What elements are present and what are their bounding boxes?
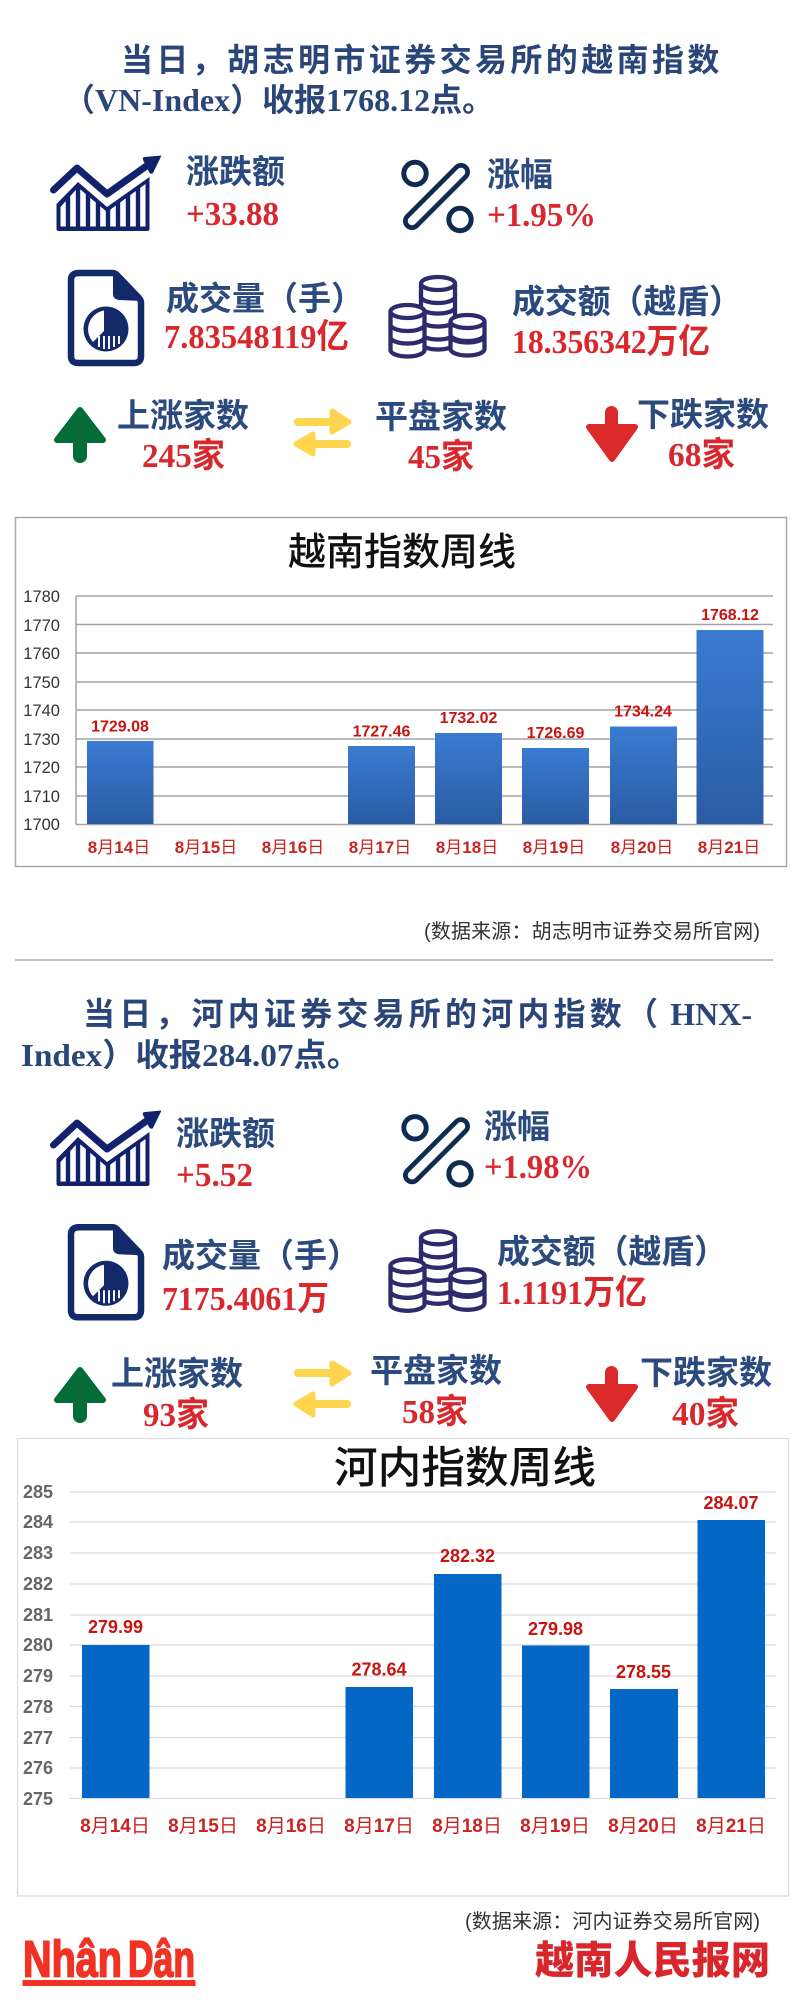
stat: change percent: 涨幅 bbox=[487, 157, 553, 194]
stat: change amount bbox=[186, 154, 285, 233]
stat: decliners bbox=[640, 1355, 772, 1433]
stat: turnover bbox=[497, 1234, 727, 1312]
stat: decliners: 下跌家数 bbox=[640, 1355, 772, 1392]
x axis labels: 8月20日 bbox=[608, 1816, 678, 1837]
icon: up arrow bbox=[57, 1370, 103, 1423]
stat: unchanged bbox=[375, 399, 507, 476]
stat: change percent bbox=[487, 157, 596, 234]
stat: unchanged: 45家 bbox=[408, 438, 474, 476]
y axis labels: 278 bbox=[23, 1697, 53, 1717]
stat: unchanged: 平盘家数 bbox=[370, 1353, 502, 1390]
stat: decliners: 下跌家数 bbox=[637, 397, 769, 434]
value labels: 1727.46 bbox=[353, 724, 411, 740]
x axis labels: 8月19日 bbox=[520, 1816, 590, 1837]
icon: down arrow bbox=[589, 406, 635, 459]
stat: decliners: 68家 bbox=[668, 436, 735, 474]
value labels: 279.99 bbox=[88, 1617, 143, 1637]
value labels bbox=[91, 607, 759, 742]
stat: change amount bbox=[176, 1116, 275, 1194]
stat: change percent: 涨幅 bbox=[484, 1109, 550, 1146]
stat: turnover: 成交额（越盾） bbox=[497, 1234, 727, 1271]
stat: advancers bbox=[111, 1356, 243, 1434]
bars bbox=[87, 630, 764, 824]
title: VN-Index bbox=[63, 42, 723, 118]
stat: advancers: 上涨家数 bbox=[117, 398, 249, 435]
stat: change amount: +5.52 bbox=[176, 1157, 253, 1194]
y axis labels: 1780 bbox=[23, 588, 60, 606]
x axis labels: 8月14日 bbox=[88, 838, 150, 857]
y axis labels: 284 bbox=[23, 1512, 53, 1532]
y axis labels: 276 bbox=[23, 1758, 53, 1778]
title: VN-Index: （VN-Index）收报1768.12点。 bbox=[63, 82, 494, 118]
value labels: 278.55 bbox=[616, 1662, 671, 1682]
stat: unchanged: 平盘家数 bbox=[375, 399, 507, 436]
stat: change amount: 涨跌额 bbox=[186, 154, 285, 191]
stat: advancers: 93家 bbox=[143, 1396, 209, 1434]
y axis labels: 283 bbox=[23, 1543, 53, 1563]
x axis labels: 8月15日 bbox=[175, 838, 237, 857]
icon: percent bbox=[404, 1117, 471, 1185]
value labels: 1729.08 bbox=[91, 718, 149, 736]
x axis labels: 8月14日 bbox=[80, 1816, 150, 1837]
y axis labels: 1760 bbox=[23, 645, 60, 663]
value labels bbox=[88, 1493, 759, 1682]
icon: rising chart bbox=[54, 1110, 162, 1186]
y axis labels: 280 bbox=[23, 1635, 53, 1655]
bars bbox=[82, 1520, 765, 1798]
stat: turnover: 1.1191万亿 bbox=[497, 1274, 647, 1312]
x axis labels: 8月17日 bbox=[349, 838, 411, 857]
logo: Nhan Dan: Dân bbox=[128, 1930, 195, 1988]
icon: unchanged arrows bbox=[296, 411, 349, 454]
icon: up arrow bbox=[57, 410, 103, 463]
value labels: 1734.24 bbox=[614, 704, 672, 720]
y axis labels: 1710 bbox=[23, 788, 60, 806]
y axis labels: 1730 bbox=[23, 731, 60, 749]
stat: volume bbox=[162, 1238, 360, 1318]
y axis labels bbox=[23, 1482, 53, 1809]
value labels: 284.07 bbox=[703, 1493, 759, 1513]
value labels: 1726.69 bbox=[527, 725, 585, 742]
stat: turnover bbox=[512, 284, 742, 361]
stat: change percent: +1.98% bbox=[484, 1149, 592, 1186]
x axis labels: 8月16日 bbox=[262, 838, 324, 857]
x axis labels bbox=[80, 1816, 766, 1837]
stat: turnover: 成交额（越盾） bbox=[512, 284, 742, 321]
x axis labels: 8月18日 bbox=[432, 1816, 502, 1837]
chart title: 河内指数周线 bbox=[334, 1445, 596, 1493]
x axis labels: 8月18日 bbox=[436, 838, 498, 857]
y axis labels: 285 bbox=[23, 1482, 53, 1502]
icon: unchanged arrows bbox=[296, 1363, 349, 1415]
y axis labels: 277 bbox=[23, 1728, 53, 1748]
stat: change percent: +1.95% bbox=[487, 197, 596, 234]
logo: Nhan Dan: Nhân bbox=[23, 1930, 122, 1988]
icon: coins bbox=[390, 1231, 484, 1311]
y axis labels bbox=[23, 588, 60, 834]
x axis labels: 8月20日 bbox=[611, 838, 673, 857]
y axis labels: 1700 bbox=[23, 816, 60, 834]
x axis labels: 8月19日 bbox=[523, 838, 585, 857]
stat: advancers: 245家 bbox=[142, 437, 225, 475]
title: VN-Index: 当日，胡志明市证券交易所的越南指数 bbox=[121, 42, 723, 78]
stat: change amount: 涨跌额 bbox=[176, 1116, 275, 1153]
stat: volume: 成交量（手） bbox=[162, 1238, 360, 1275]
x axis labels: 8月17日 bbox=[344, 1816, 414, 1837]
x axis labels: 8月15日 bbox=[168, 1816, 238, 1837]
y axis labels: 279 bbox=[23, 1666, 53, 1686]
x axis labels bbox=[88, 838, 760, 857]
x axis labels: 8月21日 bbox=[698, 838, 760, 857]
y axis labels: 275 bbox=[23, 1789, 53, 1809]
value labels: 278.64 bbox=[351, 1660, 407, 1680]
icon: rising chart bbox=[54, 156, 162, 231]
stat: decliners: 40家 bbox=[672, 1395, 739, 1433]
icon: coins bbox=[390, 277, 484, 356]
source note: HOSE: (数据来源：胡志明市证券交易所官网) bbox=[424, 920, 760, 943]
icon: percent bbox=[404, 162, 471, 231]
title: HNX-Index: Index）收报284.07点。 bbox=[21, 1037, 360, 1073]
stat: decliners bbox=[637, 397, 769, 474]
chart title: 越南指数周线 bbox=[288, 532, 516, 574]
x axis labels: 8月16日 bbox=[256, 1816, 326, 1837]
title: HNX-Index bbox=[21, 996, 752, 1073]
icon: document bbox=[71, 1227, 142, 1317]
stat: volume bbox=[164, 281, 364, 356]
stat: advancers bbox=[117, 398, 249, 475]
y axis labels: 1720 bbox=[23, 759, 60, 777]
icon: document bbox=[71, 273, 142, 363]
stat: advancers: 上涨家数 bbox=[111, 1356, 243, 1393]
stat: volume: 7.83548119亿 bbox=[164, 318, 349, 356]
value labels: 1732.02 bbox=[440, 710, 498, 727]
stat: unchanged bbox=[370, 1353, 502, 1431]
stat: volume: 成交量（手） bbox=[166, 281, 364, 318]
value labels: 279.98 bbox=[528, 1619, 583, 1639]
source note: HNX: (数据来源：河内证券交易所官网) bbox=[465, 1910, 760, 1933]
icon: down arrow bbox=[589, 1366, 635, 1419]
title: HNX-Index: 当日，河内证券交易所的河内指数（HNX- bbox=[83, 996, 752, 1032]
y axis labels: 282 bbox=[23, 1574, 53, 1594]
panel: HNX-Index weekly chart bbox=[18, 1438, 788, 1896]
value labels: 282.32 bbox=[440, 1546, 495, 1566]
stat: unchanged: 58家 bbox=[402, 1393, 468, 1431]
brand: Vietnam People's Daily: 越南人民报网 bbox=[535, 1940, 770, 1983]
stat: turnover: 18.356342万亿 bbox=[512, 323, 710, 361]
x axis labels: 8月21日 bbox=[696, 1816, 766, 1837]
y axis labels: 1750 bbox=[23, 674, 60, 692]
y axis labels: 1770 bbox=[23, 617, 60, 635]
y axis labels: 1740 bbox=[23, 702, 60, 720]
y axis labels: 281 bbox=[23, 1605, 53, 1625]
stat: volume: 7175.4061万 bbox=[162, 1281, 329, 1318]
stat: change amount: +33.88 bbox=[186, 196, 279, 233]
value labels: 1768.12 bbox=[701, 607, 759, 624]
stat: change percent bbox=[484, 1109, 592, 1186]
panel: VN-Index weekly chart bbox=[16, 518, 786, 866]
